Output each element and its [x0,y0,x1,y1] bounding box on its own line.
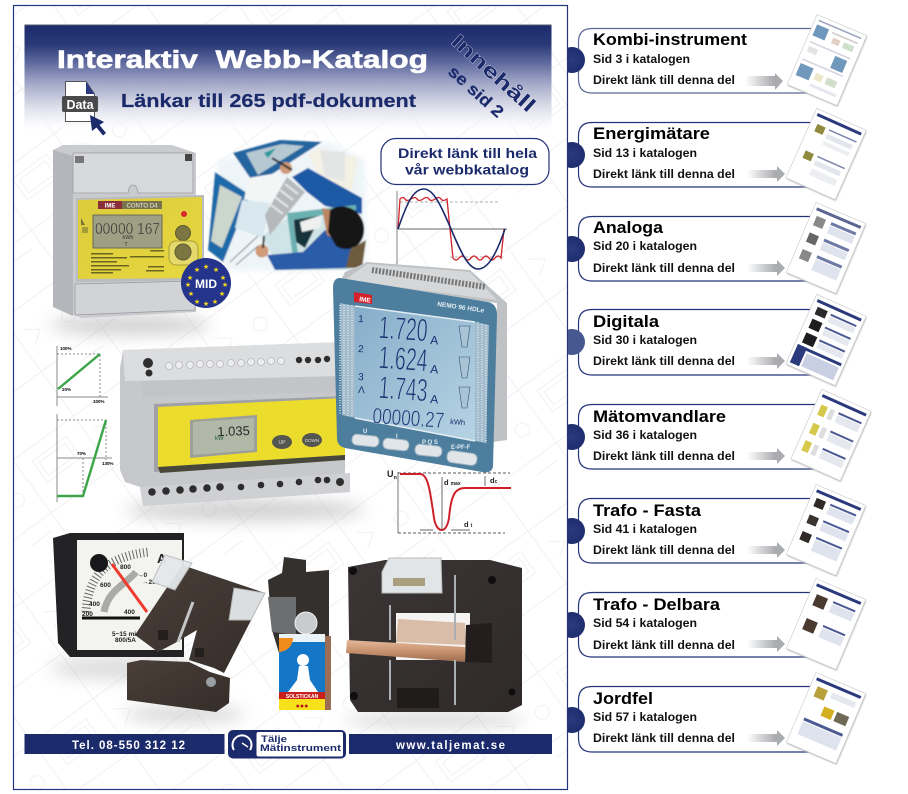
product: yellow power transducer: kW [215,436,224,442]
product: NEMO 96 HDLe multimeter: I [396,434,398,440]
badge: MID: ★ [220,274,226,282]
product: NEMO 96 HDLe multimeter: IME [359,296,372,305]
badge: MID: ★ [188,290,194,298]
section row: Trafo - Fasta: Trafo - Fasta [593,502,702,520]
section row: Jordfel: Jordfel [593,690,653,708]
footer: company logo: Tälje [261,734,287,745]
product: NEMO 96 HDLe multimeter: 00000.27 [372,403,445,433]
product: yellow power transducer: DOWN [305,438,319,443]
section row: Kombi-instrument: Direkt länk till denna del [593,75,735,87]
chart: ramp 20-100 percent: 100% [60,346,72,351]
product: NEMO 96 HDLe multimeter: 1.743 [378,369,429,408]
product: NEMO 96 HDLe multimeter: kWh [450,417,465,427]
chart: voltage dip [387,469,511,533]
header banner [24,24,552,133]
section row: Analoga [559,202,867,295]
product: analog panel meter: A [157,551,167,566]
section row: Analoga: Direkt länk till denna del [593,263,735,275]
section row: Trafo - Fasta: Sid 41 i katalogen [593,524,697,536]
thumbnail page [790,389,872,482]
section row: Trafo - Fasta: Direkt länk till denna del [593,545,735,557]
section row: Digitala: Digitala [593,313,660,331]
chart: ramp 70-130 percent [57,414,114,502]
thumbnail page [787,14,868,107]
badge: MID: ★ [185,281,191,289]
product: analog panel meter: 400 [124,609,135,616]
product: NEMO 96 HDLe multimeter: A [430,362,439,377]
product: large current transformer with copper bar [345,558,525,728]
thumbnail page [786,672,867,765]
title: Interaktiv Webb-Katalog [57,46,428,74]
matchbox: Solstickan for scale: SOLSTICKAN [286,694,319,700]
section row: Kombi-instrument: Sid 3 i katalogen [593,54,690,66]
product: NEMO 96 HDLe multimeter: 1 [358,314,364,325]
section row: Jordfel: Sid 57 i katalogen [593,712,697,724]
footer: company logo [228,730,346,758]
panel: catalogue page [14,6,568,790]
product: analog panel meter: 200 [82,611,93,618]
section row: Trafo - Fasta [559,484,867,577]
rotated heading: Innehåll se sid 2 [444,30,540,121]
footer: company logo: Mätinstrument [260,743,342,754]
section row: Trafo - Delbara: Sid 54 i katalogen [593,618,697,630]
product: NEMO 96 HDLe multimeter: NEMO 96 HDLe [437,301,485,315]
product: split-core current transformer [125,555,265,723]
badge: MID: ★ [203,263,209,271]
chart: ramp 70-130 percent: 70% [77,451,86,456]
section row: Trafo - Delbara: Direkt länk till denna del [593,640,735,652]
badge: MID: ★ [194,298,200,306]
icon: data document with cursor [62,82,106,136]
product: analog panel meter: →0 [137,572,148,579]
product: analog panel meter: 800/5A [115,637,136,644]
icon: data document with cursor: Data [66,98,95,112]
badge: MID: ★ [213,266,219,274]
matchbox: Solstickan for scale [279,634,331,710]
section row: Analoga: Analoga [593,219,664,237]
section row: Energimätare [559,108,867,201]
section row: Kombi-instrument: Kombi-instrument [593,31,748,49]
section row: Mätomvandlare: Mätomvandlare [593,408,726,426]
footer: website bar [349,734,552,754]
callout: direct link to catalogue: Direkt länk till hela [398,145,537,161]
section row: Digitala: Sid 30 i katalogen [593,335,697,347]
chart: voltage dip: dc [490,476,498,485]
product: NEMO 96 HDLe multimeter: 1.720 [378,309,429,348]
section row: Energimätare: Energimätare [593,125,710,143]
product: CONTO D4 energy meter: CONTO D4 [127,204,158,210]
chart: voltage dip: d t [464,520,473,529]
section row: Digitala [559,294,867,387]
product: NEMO 96 HDLe multimeter [333,262,507,472]
product: yellow power transducer [120,342,365,521]
product: NEMO 96 HDLe multimeter: A [430,333,439,348]
rotated heading: Innehåll se sid 2: Innehåll [447,30,540,117]
badge: MID: MID [195,277,217,291]
photo: man working at catalogue [208,140,367,272]
badge: MID: ★ [219,290,225,298]
badge: MID: ★ [203,300,209,308]
section row: Jordfel [559,672,867,765]
product: NEMO 96 HDLe multimeter: P Q S [422,440,438,446]
section row: Mätomvandlare: Sid 36 i katalogen [593,430,697,442]
subtitle: Länkar till 265 pdf-dokument [121,91,416,111]
badge: MID [181,258,231,308]
badge: MID: ★ [187,274,193,282]
chart: ramp 20-100 percent: 20% [62,387,71,392]
product: analog panel meter: 5~15 min [112,631,140,638]
chart: voltage dip: d max [444,478,461,487]
product: CONTO D4 energy meter: 00000 167 [95,221,160,238]
product: CONTO D4 energy meter: IME [105,204,115,210]
chart: ramp 20-100 percent: 100% [93,399,105,404]
product: NEMO 96 HDLe multimeter: 3 [358,372,364,383]
section row: Digitala: Direkt länk till denna del [593,356,735,368]
product: NEMO 96 HDLe multimeter: A [430,392,439,407]
product: analog panel meter [50,533,200,680]
rotated heading: Innehåll se sid 2: se sid 2 [444,63,507,121]
thumbnail page [785,108,867,201]
chart: ramp 70-130 percent: 130% [102,461,114,466]
badge: MID: ★ [212,298,218,306]
section row: Kombi-instrument [559,14,868,107]
thumbnail page [786,484,867,577]
matchbox: Solstickan for scale: ●●● [296,703,308,710]
thumbnail page [785,294,867,387]
product: analog panel meter: 600 [100,582,111,589]
callout: direct link to catalogue: vår webbkatalog [405,162,529,178]
product: analog panel meter: 400 [89,601,100,608]
product: CONTO D4 energy meter: kWh [122,235,134,241]
section row: Energimätare: Direkt länk till denna del [593,169,735,181]
chart: ramp 20-100 percent [57,346,108,406]
product: yellow power transducer: 1.035 [217,423,250,439]
section row: Jordfel: Direkt länk till denna del [593,733,735,745]
section row: Mätomvandlare [559,389,872,482]
section row: Analoga: Sid 20 i katalogen [593,241,697,253]
product: analog panel meter: 800 [120,564,131,571]
product: NEMO 96 HDLe multimeter: E-PF-F [451,445,471,451]
product: CONTO D4 energy meter [50,145,210,335]
footer: phone bar: Tel. 08-550 312 12 [72,740,185,752]
footer: website bar: www.taljemat.se [395,740,505,752]
thumbnail page [786,578,867,671]
product: small current transformer [268,557,329,653]
product: NEMO 96 HDLe multimeter: 1.624 [378,339,429,378]
chart: voltage dip: U [387,469,394,479]
section row: Trafo - Delbara [559,578,867,671]
product: NEMO 96 HDLe multimeter: Λ [358,385,365,396]
badge: MID: ★ [222,281,228,289]
badge: MID: ★ [194,266,200,274]
callout: direct link to catalogue [381,138,549,184]
product: CONTO D4 energy meter: T [124,242,128,248]
product: yellow power transducer: UP [279,440,286,446]
product: NEMO 96 HDLe multimeter: U [363,429,367,435]
footer: phone bar [24,734,224,754]
thumbnail page [786,202,867,295]
chart: voltage dip: n [394,475,398,481]
section row: Mätomvandlare: Direkt länk till denna del [593,451,735,463]
section row: Trafo - Delbara: Trafo - Delbara [593,596,721,614]
product: analog panel meter: →200 [142,579,160,586]
chart: sine and square wave [397,189,507,271]
product: NEMO 96 HDLe multimeter: 2 [358,344,364,355]
section row: Energimätare: Sid 13 i katalogen [593,148,697,160]
